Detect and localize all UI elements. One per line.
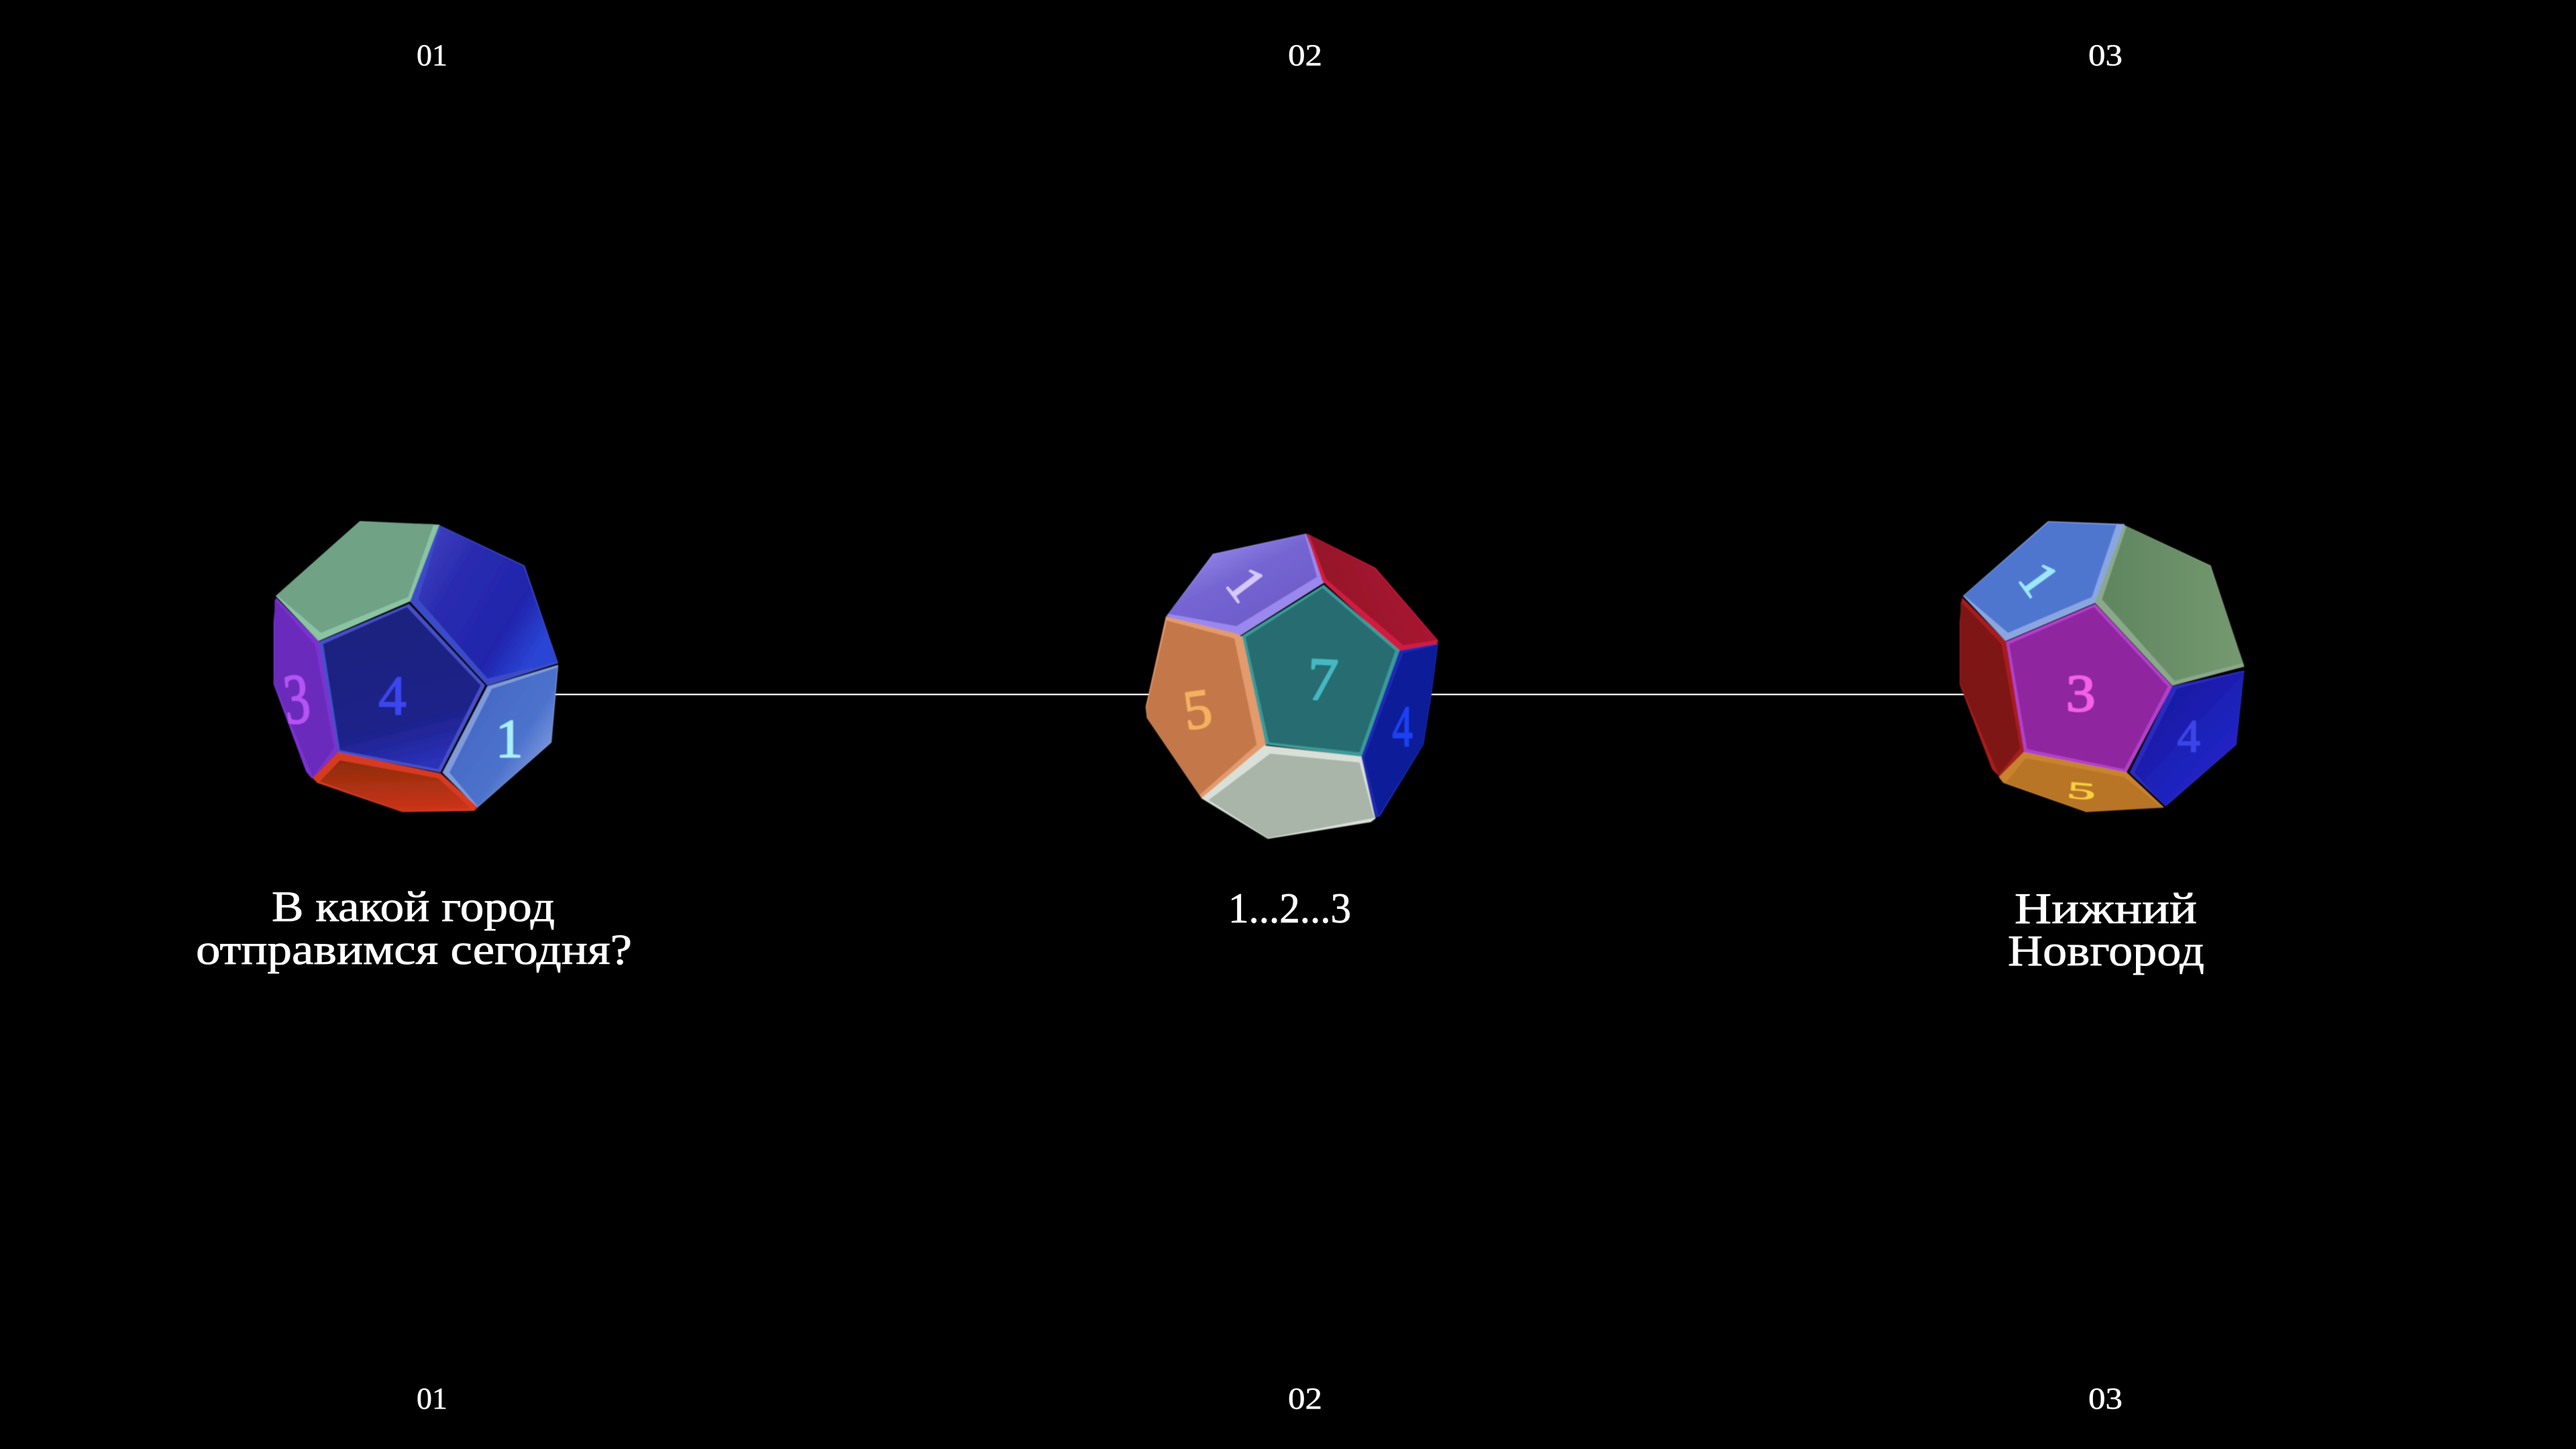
numeral 1: 1 <box>1214 556 1277 613</box>
top label 02: 02 <box>1288 38 1322 72</box>
face: teal with 7 <box>1241 585 1400 757</box>
numeral 5: 5 <box>2066 777 2097 806</box>
top label 03: 03 <box>2088 38 2123 72</box>
caption: question: отправимся сегодня? <box>196 926 632 974</box>
face: amber with 5 <box>1999 753 2163 812</box>
caption: city <box>2008 884 2204 975</box>
face: blue with 4 <box>2130 671 2244 806</box>
numeral 5: 5 <box>1179 678 1216 743</box>
top label 01: 01 <box>417 38 447 72</box>
caption: city: Нижний <box>2015 884 2197 933</box>
face: navy with 4 <box>319 604 485 773</box>
numeral 7: 7 <box>1305 645 1340 714</box>
bottom label 02: 02 <box>1288 1381 1322 1415</box>
die 1: dodecahedron showing 4 <box>274 521 558 812</box>
caption: question <box>196 883 632 974</box>
face: lilac with 1 <box>1167 534 1324 636</box>
caption: counting: 1...2...3 <box>1228 885 1351 932</box>
face: blue with 4 <box>1362 644 1438 817</box>
face: purple with 3 <box>274 598 337 778</box>
face: green <box>276 521 439 641</box>
face: red <box>313 753 478 812</box>
numeral 1: 1 <box>2006 551 2070 608</box>
face: dark red <box>1960 598 2024 776</box>
numeral 4: 4 <box>1392 695 1413 759</box>
face: upper blue <box>411 525 558 686</box>
numeral 3: 3 <box>2066 665 2096 722</box>
die 3: dodecahedron showing 3 <box>1960 521 2244 812</box>
face: grey <box>1202 746 1375 839</box>
face: green <box>2095 525 2244 686</box>
caption: question: В какой город <box>272 883 555 931</box>
face: crimson <box>1307 534 1438 652</box>
numeral 4: 4 <box>378 665 407 727</box>
face: orange with 5 <box>1146 616 1266 798</box>
connector line <box>550 694 1966 695</box>
numeral 1: 1 <box>496 708 523 769</box>
bottom label 03: 03 <box>2088 1381 2123 1415</box>
bottom label 01: 01 <box>417 1381 447 1415</box>
numeral 4: 4 <box>2177 711 2200 762</box>
numeral 3: 3 <box>280 659 314 740</box>
face: light blue with 1 <box>1964 521 2125 641</box>
die 2: dodecahedron showing 7 <box>1146 534 1438 839</box>
face: light blue with 1 <box>443 665 558 807</box>
caption: city: Новгород <box>2008 926 2204 975</box>
face: magenta with 3 <box>2006 604 2172 773</box>
